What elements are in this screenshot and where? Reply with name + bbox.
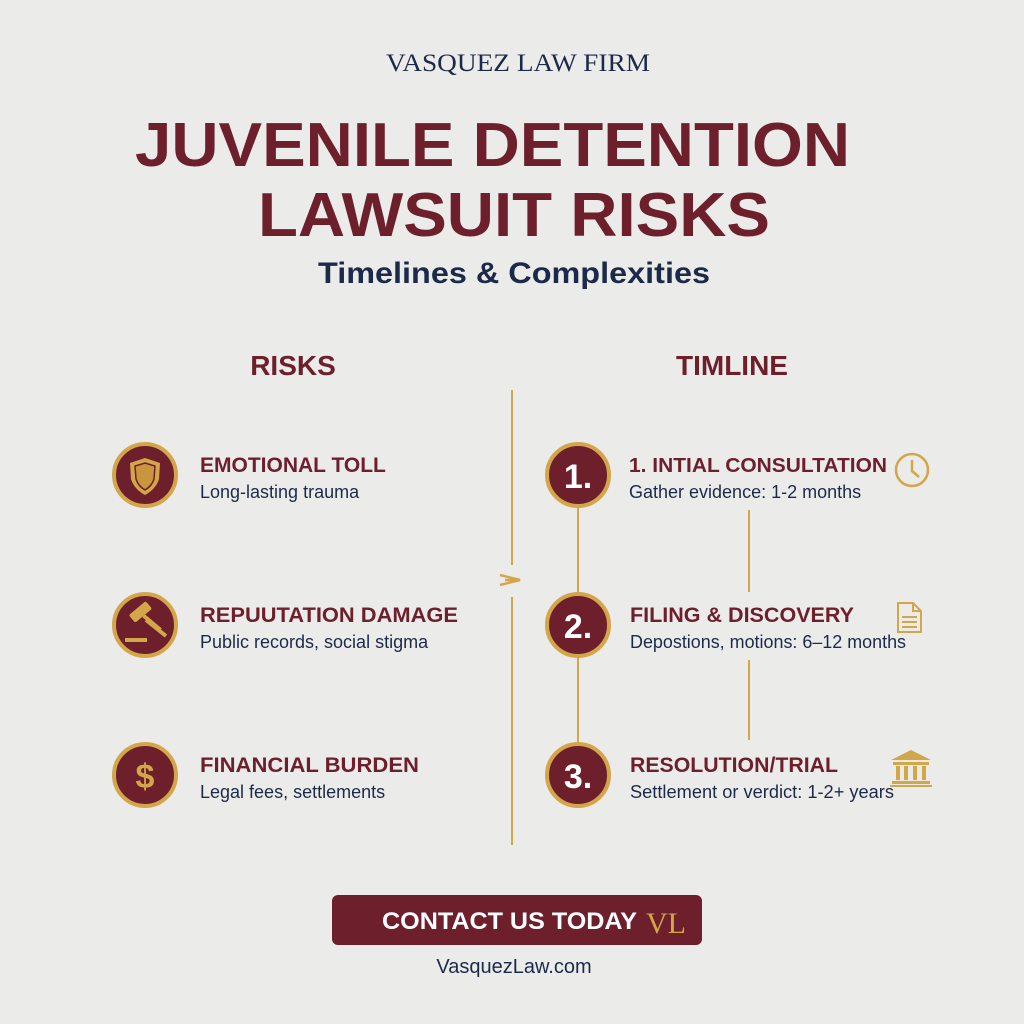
subtitle: Timelines & Complexities (318, 257, 710, 290)
icon: gavel (114, 594, 176, 656)
center divider (511, 390, 513, 845)
step 2 text (630, 604, 906, 652)
step 2 badge: 2. (564, 608, 592, 646)
icon: clock (896, 454, 928, 486)
title: LAWSUIT RISKS (258, 181, 770, 250)
website: VasquezLaw.com (436, 956, 592, 978)
step 3 badge (547, 744, 609, 806)
heading: timeline: TIMLINE (676, 350, 788, 381)
step 1 text (629, 455, 887, 502)
panel: risks (114, 444, 458, 806)
step 3 text (630, 754, 894, 802)
icon: shield (114, 444, 176, 506)
risk: emotional toll: Long-lasting trauma (200, 482, 360, 502)
icon: dollar (114, 744, 176, 806)
step 1 badge (547, 444, 609, 506)
step 3 badge: 3. (564, 758, 592, 796)
risk: financial burden (200, 754, 419, 802)
step 1 text: Gather evidence: 1-2 months (629, 482, 861, 502)
step 1 text: 1. INTIAL CONSULTATION (629, 455, 887, 477)
arrow (500, 575, 520, 585)
button: contact us: CONTACT US TODAY (382, 908, 637, 935)
step 3 text: Settlement or verdict: 1-2+ years (630, 782, 894, 802)
risk: emotional toll (200, 454, 386, 502)
risk: financial burden: FINANCIAL BURDEN (200, 754, 419, 777)
icon: document (898, 603, 921, 632)
step 2 text: FILING & DISCOVERY (630, 604, 854, 627)
icon: dollar: $ (136, 758, 155, 796)
title: JUVENILE DETENTION (135, 111, 850, 180)
risk: emotional toll: EMOTIONAL TOLL (200, 454, 386, 477)
risk: reputation damage: Public records, social stigma (200, 632, 429, 652)
step 2 text: Depostions, motions: 6–12 months (630, 632, 906, 652)
panel: timeline (547, 444, 932, 806)
firm name: VASQUEZ LAW FIRM (386, 50, 650, 77)
step 2 badge (547, 594, 609, 656)
heading: risks: RISKS (250, 350, 336, 381)
title (135, 111, 850, 250)
risk: reputation damage (200, 604, 458, 652)
button: contact us (332, 895, 702, 945)
risk: financial burden: Legal fees, settlements (200, 782, 385, 802)
step 1 badge: 1. (564, 458, 592, 496)
icon: courthouse (890, 750, 932, 787)
step 3 text: RESOLUTION/TRIAL (630, 754, 838, 777)
risk: reputation damage: REPUUTATION DAMAGE (200, 604, 458, 627)
button: contact us: VL (646, 907, 686, 940)
